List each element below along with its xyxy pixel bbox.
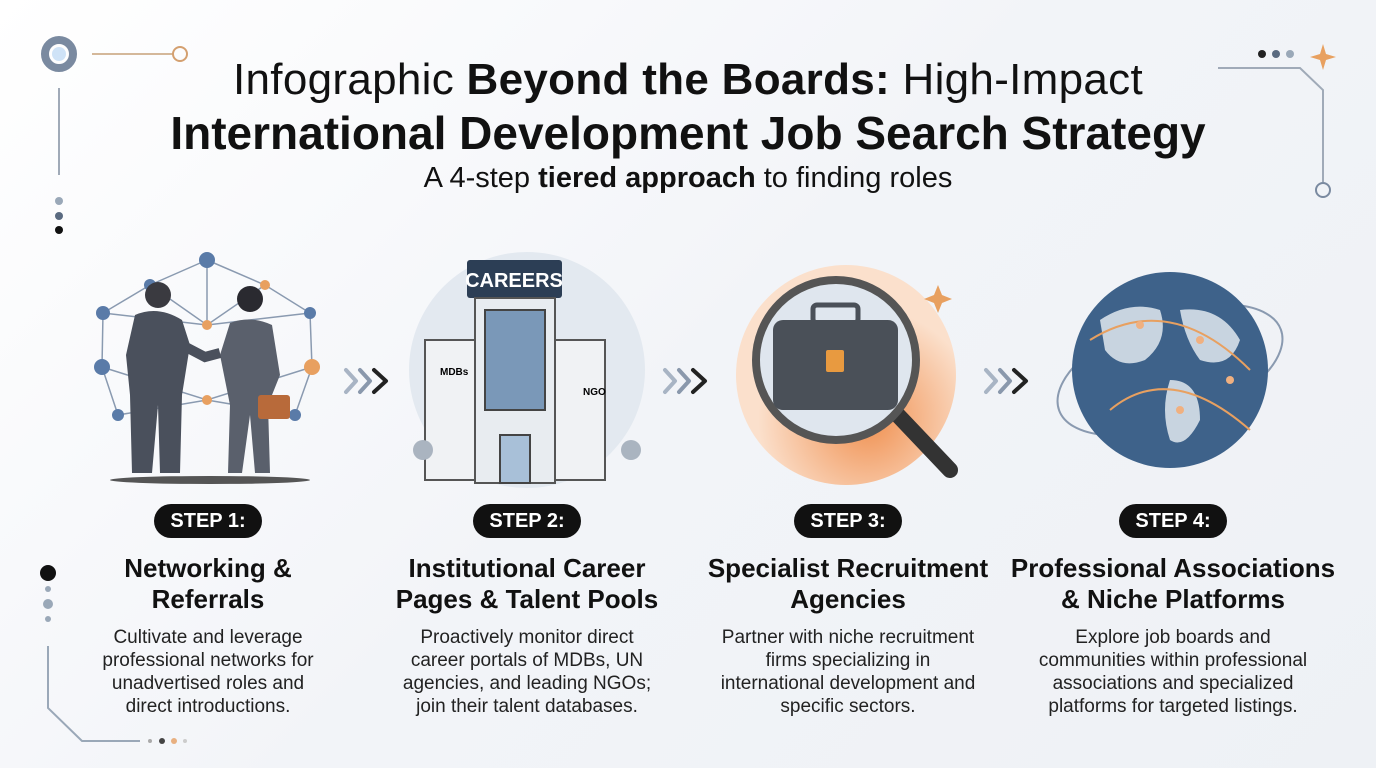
icon: careers building: NGO (583, 387, 606, 398)
pill 3 (794, 504, 902, 538)
text 2: Proactively monitor direct career portals of MDBs, UN agencies, and leading NGOs; join their talent databases. (403, 627, 651, 717)
pill 4: STEP 4: (1135, 510, 1211, 532)
heading 1: Networking & (124, 553, 292, 583)
heading 2: Institutional Career Pages & Talent Pools (396, 553, 658, 614)
pill 2 (473, 504, 581, 538)
icon: careers building: CAREERS (465, 270, 563, 292)
icon: careers building: MDBs (440, 367, 469, 378)
pill 1: STEP 1: (170, 510, 246, 532)
arrow 1 (344, 368, 388, 394)
title: Infographic Beyond the Boards: High-Impact (233, 55, 1143, 104)
heading 3: Specialist Recruitment Agencies (708, 553, 988, 614)
icon: magnifier briefcase (736, 265, 958, 485)
pill 4 (1119, 504, 1227, 538)
icon: careers building (409, 252, 645, 488)
heading 4: Professional Associations & Niche Platforms (1011, 553, 1335, 614)
text 3: Partner with niche recruitment firms specializing in international development and specific sectors. (721, 627, 975, 717)
subtitle: A 4-step tiered approach to finding roles (424, 162, 952, 194)
heading 1 (124, 553, 292, 614)
pill 1 (154, 504, 262, 538)
text 1: Cultivate and leverage professional networks for unadvertised roles and direct introductions. (102, 627, 314, 717)
text 4: Explore job boards and communities within professional associations and specialized platforms for targeted listings. (1039, 627, 1307, 717)
pill 2: STEP 2: (489, 510, 565, 532)
arrow 3 (984, 368, 1028, 394)
pill 3: STEP 3: (810, 510, 886, 532)
icon: globe (1056, 272, 1284, 468)
heading 1: Referrals (152, 584, 264, 614)
arrow 2 (662, 368, 708, 394)
title line 2: International Development Job Search Strategy (170, 107, 1206, 159)
icon: networking handshake (94, 252, 320, 484)
